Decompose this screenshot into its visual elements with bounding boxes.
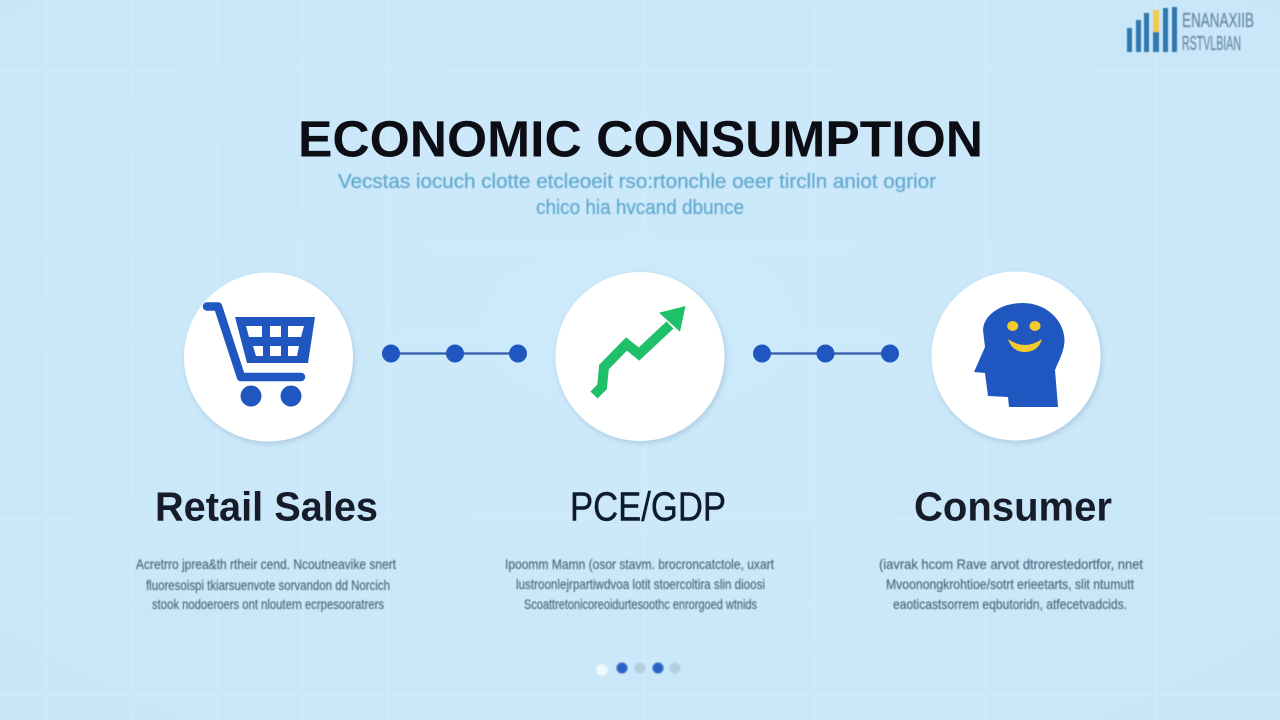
subtitle [338, 171, 936, 219]
icon: green growth arrow [594, 306, 686, 395]
heading: consumer: Consumer [914, 484, 1112, 530]
text block: retail sales: fluoresoispi tkiarsuenvote sorvandon dd Norcich [146, 577, 390, 593]
logo [1127, 7, 1254, 55]
connector: PCE to consumer [753, 344, 899, 362]
text block: PCE/GDP: Scoattretonicoreoidurtesoothc enrorgoed wtnids [524, 596, 757, 612]
text block: consumer [879, 556, 1143, 612]
icon: shopping cart [207, 306, 315, 406]
text block: consumer: (iavrak hcom Rave arvot dtrorestedortfor, nnet [879, 556, 1143, 572]
panel: PCE/GDP [505, 272, 774, 612]
panel: consumer [879, 272, 1143, 612]
text block: retail sales [136, 556, 396, 612]
logo text [1182, 10, 1254, 55]
pagination dots [596, 662, 680, 676]
connector: retail sales to PCE [382, 344, 527, 362]
icon circle: consumer [932, 272, 1100, 440]
subtitle: chico hia hvcand dbunce [536, 197, 744, 219]
logo bars [1127, 7, 1177, 52]
text block: consumer: eaoticastsorrem eqbutoridn, atfecetvadcids. [893, 596, 1127, 612]
text block: consumer: Mvoonongkrohtioe/sotrt erieetarts, slit ntumutt [886, 576, 1134, 592]
text block: PCE/GDP: lustroonlejrpartiwdvoa lotit stoercoltira slin dioosi [516, 576, 765, 592]
icon circle: retail sales [184, 272, 353, 442]
panel: retail sales [136, 272, 396, 612]
text block: PCE/GDP: Ipoomm Mamn (osor stavm. brocroncatctole, uxart [505, 556, 774, 572]
title: ECONOMIC CONSUMPTION [298, 110, 983, 168]
subtitle: Vecstas iocuch clotte etcleoeit rso:rtonchle oeer tirclln aniot ogrior [338, 171, 936, 193]
icon: smiling head [974, 303, 1064, 407]
icon circle: PCE/GDP [556, 272, 724, 441]
text block: retail sales: Acretrro jprea&th rtheir cend. Ncoutneavike snert [136, 556, 396, 572]
text block: PCE/GDP [505, 556, 774, 612]
text block: retail sales: stook nodoeroers ont nloutern ecrpesooratrers [152, 596, 384, 612]
heading: retail sales: Retail Sales [155, 484, 378, 530]
heading: PCE/GDP: PCE/GDP [570, 484, 726, 530]
